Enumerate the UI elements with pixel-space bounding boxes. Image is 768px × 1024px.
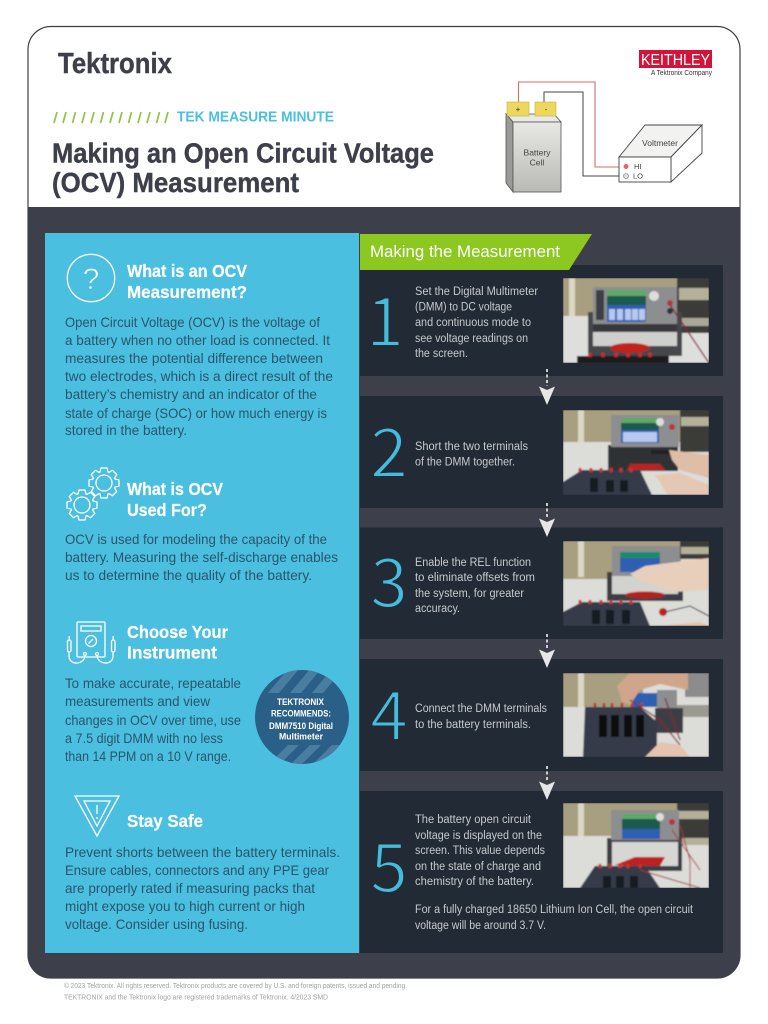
text: step 4: to the battery terminals. [415,719,531,731]
number 1: 1 [366,267,404,366]
heading: What is an OCV Measurement: What is an OCV [127,261,247,281]
text: instrument guidance: a 7.5 digit DMM with no less [65,730,223,746]
text: OCV definition [65,314,333,438]
footer legal text [64,982,407,1002]
logo: Keithley: KEITHLEY [641,52,710,69]
dark content area [28,207,740,978]
arrow: step 3 to 4 [539,634,555,668]
heading: Choose Your Instrument: Choose Your [127,622,228,642]
text: OCV definition: battery’s chemistry and an indicator of the [65,386,317,402]
badge: Tektronix recommends: Multimeter [279,732,323,742]
text: step 2 [415,441,528,468]
icon: multimeter [68,622,115,663]
diagram: battery cell and voltmeter: LO [633,172,643,180]
heading: What is an OCV Measurement: Measurement? [127,282,247,302]
icon: gears [67,468,119,520]
logo: Keithley: A Tektronix Company [651,70,712,77]
text: step 3: to eliminate offsets from [415,572,535,584]
text: safety guidance: Ensure cables, connectors and any PPE gear [65,862,329,878]
panel: step 3 [360,528,723,639]
badge: Tektronix recommends [255,669,349,765]
text: step 2: Short the two terminals [415,441,528,453]
banner: Making the Measurement: Making the Measurement [370,243,560,261]
text: step 5: voltage will be around 3.7 V. [415,920,546,932]
logo: Tektronix: Tektronix [58,48,172,80]
eyebrow: Tek Measure Minute [54,108,334,126]
diagram: battery cell and voltmeter: Battery [524,148,551,158]
text: step 4: Connect the DMM terminals [415,703,547,715]
photo: enabling REL function [563,541,709,626]
photo: shorting the terminals [563,410,709,495]
text: step 1: (DMM) to DC voltage [415,302,512,314]
text: step 5: screen. This value depends [415,845,545,857]
text: instrument guidance: To make accurate, repeatable [65,675,241,691]
heading: Stay Safe: Stay Safe [127,811,203,831]
text: step 5: chemistry of the battery. [415,876,534,888]
text: safety guidance: Prevent shorts between the battery terminals. [65,844,340,860]
panel: OCV information [45,233,359,953]
panel: step 1 [360,265,723,376]
icon: warning triangle [75,796,119,836]
number 2: 2 [370,398,408,497]
panel: step 2 [360,396,723,508]
text: step 2: of the DMM together. [415,456,515,468]
arrow: step 1 to 2 [539,369,555,405]
heading: Choose Your Instrument: Instrument [127,642,217,662]
heading: What is OCV Used For: Used For? [127,500,207,520]
text: OCV uses: us to determine the quality of the battery. [65,567,312,583]
title: (OCV) Measurement [52,167,299,198]
text: step 1: see voltage readings on [415,333,528,345]
text: step 3: accuracy. [415,603,460,615]
text: step 5 [415,814,694,932]
arrow: step 4 to 5 [539,766,555,800]
icon: question mark: ? [83,263,99,296]
text: instrument guidance: measurements and view [65,693,211,709]
logo: Keithley [639,50,712,77]
text: safety guidance: are properly rated if measuring packs that [65,880,315,896]
text: step 1: the screen. [415,348,468,360]
text: OCV uses: OCV is used for modeling the capacity of the [65,531,327,547]
diagram: battery cell and voltmeter [506,82,702,192]
title: Making an Open Circuit Voltage [52,138,434,168]
text: step 5: on the state of charge and [415,861,541,873]
text: instrument guidance [65,675,241,764]
footer legal text: TEKTRONIX and the Tektronix logo are registered trademarks of Tektronix. 4/2023 SMD [64,994,328,1002]
heading: What is OCV Used For: What is OCV [127,479,223,499]
text: instrument guidance: changes in OCV over time, use [65,712,241,728]
icon: question mark [67,254,115,302]
title [52,138,434,198]
text: step 1: and continuous mode to [415,317,531,329]
text: step 3: the system, for greater [415,588,524,600]
text: OCV definition: state of charge (SOC) or how much energy is [65,405,327,421]
text: step 3: Enable the REL function [415,557,531,569]
text: OCV definition: stored in the battery. [65,422,187,438]
text: step 1: Set the Digital Multimeter [415,286,538,298]
text: OCV definition: two electrodes, which is a direct result of the [65,368,333,384]
heading: Choose Your Instrument [127,622,228,662]
eyebrow: Tek Measure Minute: TEK MEASURE MINUTE [177,108,334,126]
text: safety guidance: might expose you to high current or high [65,898,305,914]
text: OCV definition: a battery when no other load is connected. It [65,332,330,348]
badge: Tektronix recommends: TEKTRONIX [277,697,324,707]
text: safety guidance [65,844,340,932]
text: OCV uses [65,531,338,583]
text: OCV definition: measures the potential difference between [65,350,323,366]
text: instrument guidance: than 14 PPM on a 10 V range. [65,748,231,764]
text: step 1 [415,286,538,360]
diagram: battery cell and voltmeter: + [516,105,521,114]
text: step 5: voltage is displayed on the [415,830,542,842]
number 4: 4 [370,661,408,760]
photo: OCV displayed [563,803,709,888]
banner: Making the Measurement [360,234,592,270]
heading: What is OCV Used For [127,479,223,520]
photo: DMM in continuous mode [563,278,709,363]
diagram: battery cell and voltmeter: Voltmeter [642,138,678,148]
diagram: battery cell and voltmeter: HI [634,162,642,171]
diagram: battery cell and voltmeter: - [545,105,548,114]
text: safety guidance: voltage. Consider using fusing. [65,916,248,932]
panel: step 4 [360,659,723,771]
number 5: 5 [370,813,408,912]
arrow: step 2 to 3 [539,503,555,537]
panel: step 5 [360,791,723,953]
photo: connecting to battery [563,673,709,757]
number 3: 3 [370,528,408,627]
text: step 5: For a fully charged 18650 Lithium Ion Cell, the open circuit [415,904,694,916]
footer legal text: © 2023 Tektronix. All rights reserved. Tektronix products are covered by U.S. and foreign patents, issued and pending. [64,982,407,990]
text: OCV definition: Open Circuit Voltage (OCV) is the voltage of [65,314,320,330]
heading: What is an OCV Measurement [127,261,247,302]
badge: Tektronix recommends: DMM7510 Digital [269,721,333,731]
text: step 5: The battery open circuit [415,814,532,826]
text: OCV uses: battery. Measuring the self-discharge enables [65,549,338,565]
badge: Tektronix recommends: RECOMMENDS: [271,708,331,718]
text: step 3 [415,557,535,615]
diagram: battery cell and voltmeter: Cell [530,158,544,168]
text: step 4 [415,703,547,731]
